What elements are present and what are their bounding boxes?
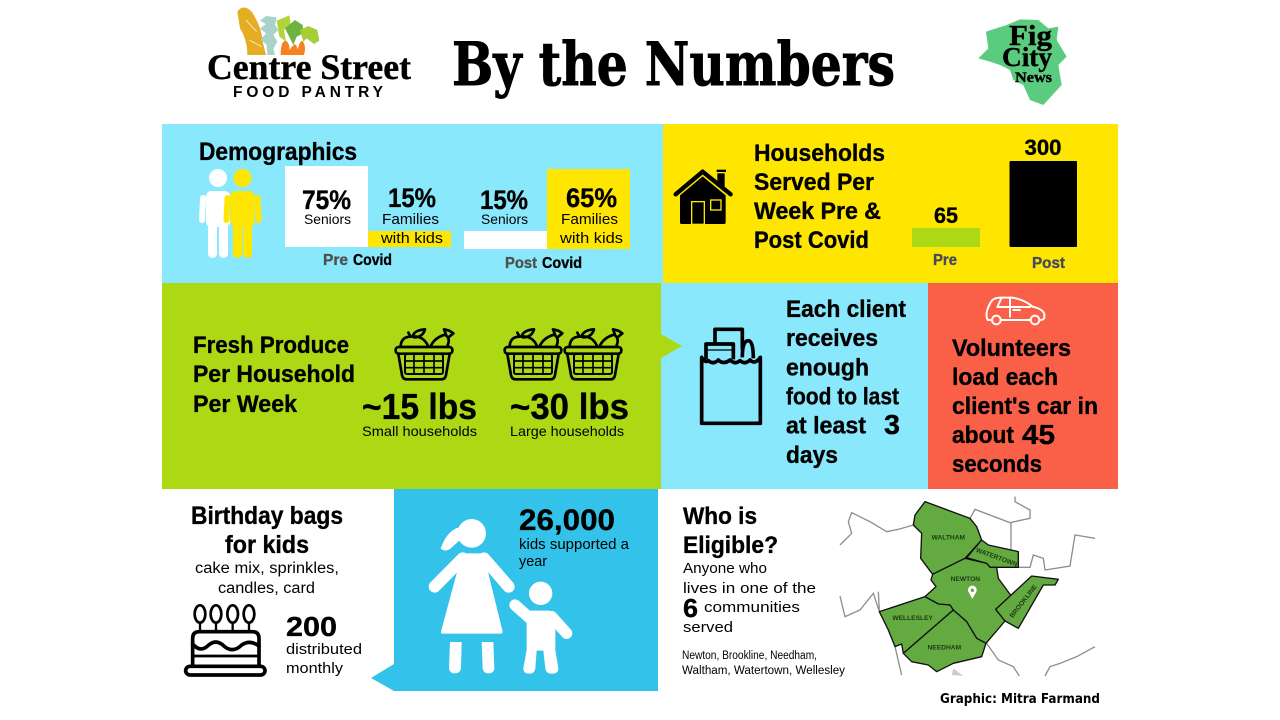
text: eligibility: lives in one of the [683,580,816,597]
text: bag contents: cake mix, sprinkles, [195,560,339,577]
stat: 26,000 kids: year [519,554,547,570]
panel: birthday bags [186,502,362,677]
logo text: Centre Street: Centre Street [207,47,411,87]
post covid chart: 65% [566,183,617,213]
logo: Centre Street Food Pantry [207,7,411,101]
map: six communities: WELLESLEY [892,615,934,622]
bar chart: pre and post: 300 [1024,135,1062,160]
icon: vegetables and bread [237,7,319,55]
text: each client receives: enough [786,354,869,382]
stat: 26,000 kids [519,504,630,570]
panel: fresh produce [162,283,682,489]
text: volunteers load cars: Volunteers [952,335,1071,362]
pre covid chart: Pre [323,252,348,269]
icon: produce basket small [396,329,453,379]
heading: fresh produce per household: Per Household [193,361,355,388]
text: eligibility: served [683,619,733,636]
text: volunteers load cars [952,335,1098,478]
panel: households served [663,124,1118,283]
bar chart: pre and post: Pre [933,252,957,269]
map: six communities: WALTHAM [932,535,966,542]
post covid chart: 15% [480,185,528,215]
logo text: Fig: Fig [1009,20,1053,52]
logo text: Food Pantry: FOOD PANTRY [233,84,384,101]
pre covid chart: Covid [353,252,392,269]
stat: small households: ~15 lbs [362,386,477,427]
stat: 200 distributed monthly: monthly [286,660,344,677]
text: volunteers load cars: about [952,422,1014,449]
panel: who is eligible [682,497,1095,677]
text: community list: Newton, Brookline, Needham, [682,650,817,662]
logo text: City: City [1002,42,1052,72]
heading: who is eligible: Eligible? [683,532,778,559]
bar chart: pre and post [912,135,1077,272]
map: six communities: WATERTOWN [975,547,1018,569]
pre covid chart: Families [382,211,439,228]
pre covid chart: 75% [302,185,351,215]
heading: households served per week: Week Pre & [754,198,881,225]
icon: car [987,298,1044,324]
pre covid chart [285,166,451,269]
credit: graphic by: Graphic: Mitra Farmand [940,692,1100,707]
icon: birthday cake [186,605,265,675]
stat: large households: Large households [510,423,624,439]
post covid chart [464,169,630,272]
map: six communities: NEWTON [951,576,980,583]
icon: produce basket large two [565,329,622,379]
text: volunteers load cars: load each [952,364,1058,391]
map: six communities: BROOKLINE [1009,583,1039,620]
map silhouette [978,19,1067,105]
bar chart: pre and post: Post [1032,255,1066,272]
text: volunteers load cars: seconds [952,451,1042,478]
icon: house [676,170,731,224]
post covid chart: Covid [542,255,582,272]
text: community list [682,650,845,677]
panel: food to last [661,283,928,489]
heading: households served per week [754,140,885,254]
text: each client receives: 3 [884,409,900,440]
heading: demographics: Demographics [199,138,357,166]
panel: demographics [162,124,663,283]
pre covid chart: Seniors [304,211,351,227]
text: each client receives: food to last [786,384,899,410]
text: eligibility: communities [704,599,800,616]
stat: 26,000 kids: 26,000 [519,504,615,537]
text: volunteers load cars: client's car in [952,393,1098,420]
post covid chart: Post [505,255,538,272]
stat: 200 distributed monthly: distributed [286,641,362,658]
logo: Fig City News [978,19,1067,105]
panel: volunteers [928,283,1118,489]
text: each client receives [786,296,906,469]
map: six communities [840,497,1095,676]
heading: fresh produce per household [193,332,355,418]
heading: who is eligible [683,503,778,559]
text: eligibility [683,560,816,636]
heading: fresh produce per household: Per Week [193,391,298,418]
heading: fresh produce per household: Fresh Produce [193,332,349,359]
text: community list: Waltham, Watertown, Wellesley [682,665,845,677]
stat: small households: Small households [362,423,477,439]
heading: households served per week: Post Covid [754,227,869,254]
stat: 26,000 kids: kids supported a [519,537,630,553]
pre covid chart: with kids [380,230,443,247]
text: bag contents: candles, card [218,580,315,597]
text: volunteers load cars: 45 [1022,419,1055,450]
text: eligibility: Anyone who [683,560,767,577]
text: bag contents [195,560,339,597]
map: six communities: NEEDHAM [928,645,962,652]
stat: large households: ~30 lbs [510,386,629,427]
stat: 200 distributed monthly: 200 [286,611,337,642]
icon: grocery bag [702,329,760,423]
stat: 200 distributed monthly [286,611,362,677]
heading: birthday bags for kids: for kids [225,531,309,559]
post covid chart: Families [561,211,618,228]
panel: kids supported [371,489,658,691]
text: each client receives: Each client [786,296,906,323]
bar chart: pre and post: 65 [934,203,958,228]
text: each client receives: days [786,442,838,469]
icon: two people [202,169,258,258]
heading: birthday bags for kids [191,502,343,559]
post covid chart: Seniors [481,211,528,227]
icon: produce basket large one [505,329,562,379]
heading: households served per week: Served Per [754,169,874,196]
post covid chart: with kids [559,230,623,247]
text: each client receives: at least [786,412,866,440]
heading: who is eligible: Who is [683,503,757,530]
title: By the Numbers [452,30,895,100]
text: each client receives: receives [786,325,878,352]
text: eligibility: 6 [683,593,698,623]
icon: mother and child [435,519,567,674]
logo text: News: News [1015,70,1052,86]
heading: households served per week: Households [754,140,885,167]
pre covid chart: 15% [388,183,436,213]
heading: birthday bags for kids: Birthday bags [191,502,343,530]
